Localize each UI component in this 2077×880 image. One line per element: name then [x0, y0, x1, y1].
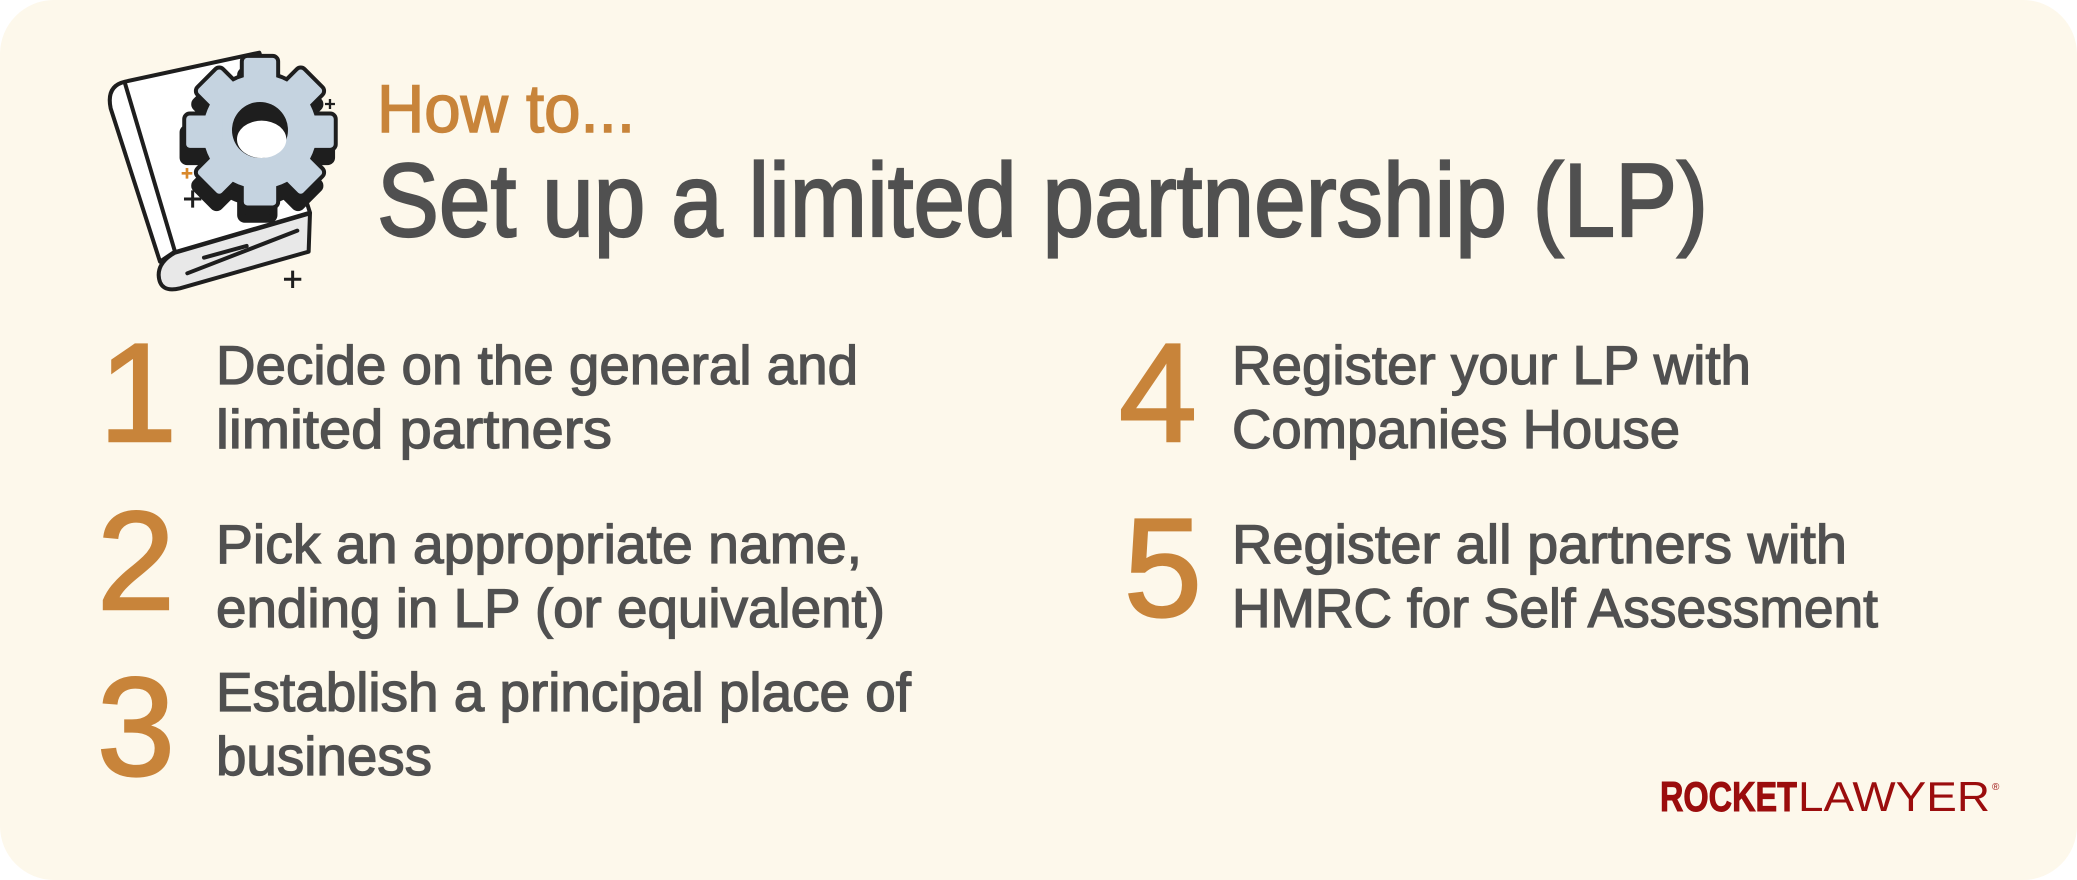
step 3: Establish a principal place of: [216, 661, 912, 723]
step 2: Pick an appropriate name,: [216, 513, 862, 575]
step 5: HMRC for Self Assessment: [1232, 577, 1878, 639]
step 4: 4: [1119, 314, 1197, 471]
icon: book with gear: [110, 53, 335, 289]
step 4: [1119, 314, 1751, 471]
step 2: [97, 482, 885, 639]
step 2: ending in LP (or equivalent): [216, 577, 885, 639]
title: Set up a limited partnership (LP): [377, 143, 1708, 259]
logo: Rocket Lawyer: LAWYER: [1798, 773, 1990, 820]
step 1: Decide on the general and: [216, 334, 858, 396]
gear shadow: [184, 71, 331, 219]
step 1: [99, 314, 858, 471]
gear hole: [232, 102, 288, 158]
step 3: business: [216, 725, 432, 787]
book pages: [159, 213, 310, 289]
sparkles: [182, 168, 192, 179]
step 4: Companies House: [1232, 398, 1680, 460]
logo: Rocket Lawyer: ®: [1992, 782, 2000, 793]
gear outline: [186, 58, 334, 205]
step 1: limited partners: [216, 398, 612, 460]
step 5: 5: [1124, 489, 1202, 646]
logo: Rocket Lawyer: ROCKET: [1660, 773, 1797, 820]
step 4: Register your LP with: [1232, 334, 1751, 396]
gear fill: [186, 58, 334, 205]
logo: Rocket Lawyer: [1660, 773, 2000, 820]
book cover: [110, 53, 310, 262]
step 5: Register all partners with: [1232, 513, 1847, 575]
step 3: [97, 648, 912, 805]
step 2: 2: [97, 482, 175, 639]
step 5: [1124, 489, 1878, 646]
step 1: 1: [99, 314, 177, 471]
step 3: 3: [97, 648, 175, 805]
subtitle: How to...: How to...: [377, 71, 635, 147]
